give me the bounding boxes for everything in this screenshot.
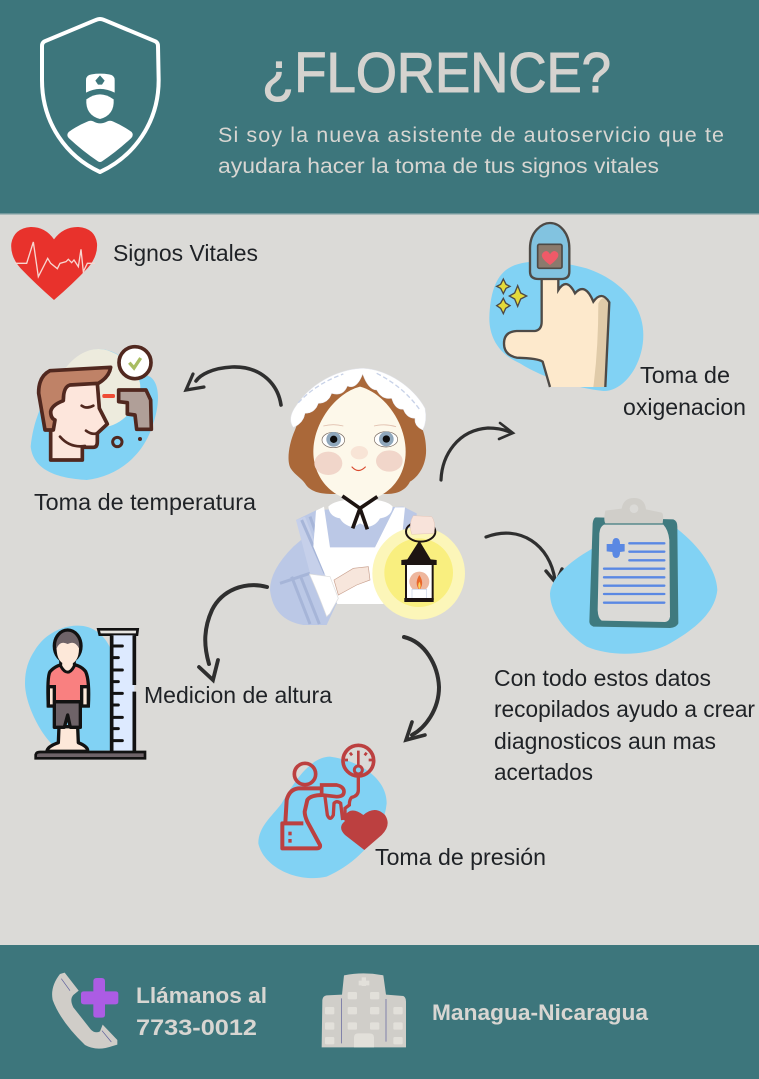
lantern bbox=[406, 522, 435, 542]
apron bbox=[313, 507, 405, 604]
body text: diagnosis: Con todo estos datos bbox=[494, 665, 711, 691]
icon: hospital bbox=[322, 973, 406, 1047]
icon: shield with nurse bbox=[42, 19, 159, 172]
label: Signos Vitales: Signos Vitales bbox=[113, 240, 258, 266]
lantern glow bbox=[372, 527, 465, 620]
arrow: to clipboard bbox=[486, 533, 562, 583]
arrow: to height bbox=[199, 585, 267, 680]
ribbon bbox=[342, 496, 377, 529]
hand on lantern bbox=[410, 516, 435, 534]
icon: height measurement bbox=[25, 626, 145, 758]
cheeks bbox=[314, 452, 342, 475]
body text: diagnosis: diagnosticos aun mas bbox=[494, 728, 716, 754]
arrow: to temperature bbox=[186, 367, 281, 405]
illustration: Florence Nightingale with lantern bbox=[270, 368, 465, 625]
title: ¿FLORENCE? bbox=[262, 41, 611, 105]
icon: finger pulse oximeter bbox=[489, 223, 643, 391]
subtitle bbox=[218, 123, 724, 178]
header band bbox=[0, 0, 759, 215]
eyes bbox=[322, 432, 345, 448]
nose and mouth bbox=[351, 446, 368, 459]
footer text: phone: Llámanos al bbox=[136, 983, 267, 1008]
body text: diagnosis bbox=[494, 665, 755, 785]
label: Toma de oxigenacion bbox=[623, 362, 746, 420]
icon: red heart with ECG line bbox=[11, 227, 97, 300]
label: Toma de oxigenacion: oxigenacion bbox=[623, 394, 746, 420]
label: Toma de temperatura: Toma de temperatura bbox=[34, 489, 256, 515]
footer text: phone: 7733-0012 bbox=[136, 1015, 257, 1040]
arrow: to oxygenation bbox=[441, 423, 513, 480]
arrow: to blood pressure bbox=[404, 637, 439, 740]
left hand bbox=[334, 567, 370, 595]
collar bbox=[328, 498, 393, 527]
footer text: location: Managua-Nicaragua bbox=[432, 1000, 649, 1025]
body text: diagnosis: recopilados ayudo a crear bbox=[494, 696, 755, 722]
icon: phone with plus bbox=[52, 973, 118, 1049]
label: Toma de presión: Toma de presión bbox=[375, 844, 546, 870]
icon: temperature check bbox=[31, 347, 158, 480]
subtitle: ayudara hacer la toma de tus signos vitales bbox=[218, 154, 659, 178]
dress bbox=[270, 507, 417, 625]
icon: clipboard with report bbox=[550, 498, 717, 654]
icon: blood pressure bbox=[258, 745, 388, 878]
subtitle: Si soy la nueva asistente de autoservicio que te bbox=[218, 123, 724, 147]
footer text: phone bbox=[136, 983, 267, 1040]
body text: diagnosis: acertados bbox=[494, 759, 593, 785]
label: Toma de oxigenacion: Toma de bbox=[640, 362, 730, 388]
label: Medicion de altura: Medicion de altura bbox=[144, 682, 332, 708]
face bbox=[313, 387, 406, 501]
bonnet bbox=[291, 368, 426, 430]
footer band bbox=[0, 945, 759, 1079]
hair bbox=[289, 374, 426, 494]
